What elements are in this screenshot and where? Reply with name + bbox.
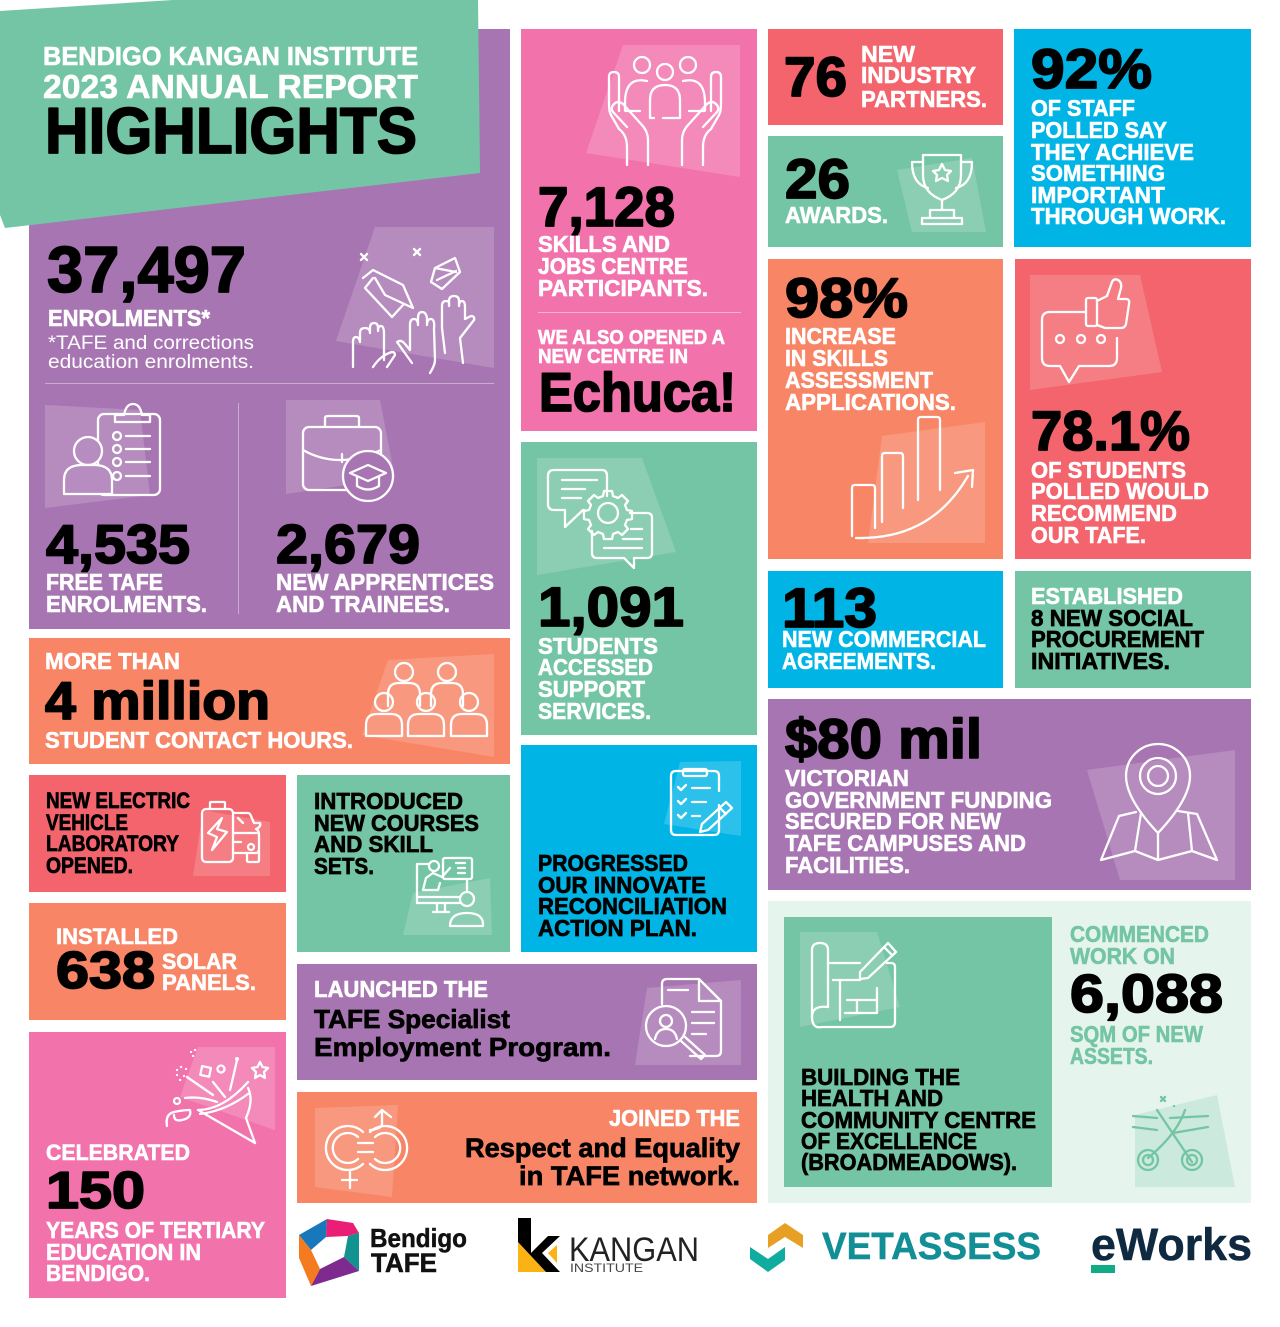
panel: respect and equality: in TAFE network. bbox=[519, 1161, 740, 1191]
icon: gender equality symbols bbox=[315, 1105, 407, 1197]
panel: reconciliation action plan bbox=[521, 745, 757, 952]
panel: skills and jobs centre: WE ALSO OPENED A bbox=[538, 327, 725, 349]
panel: solar panels: 638 bbox=[56, 942, 155, 1000]
panel: 98% skills assessment: 98% bbox=[785, 266, 908, 329]
icon: trophy bbox=[897, 155, 986, 232]
sub-panel: building the centre: OF EXCELLENCE bbox=[801, 1128, 977, 1154]
panel: social procurement: ESTABLISHED bbox=[1031, 583, 1183, 609]
stat: 6,088 sqm: COMMENCED bbox=[1070, 921, 1209, 947]
panel: 76 industry partners bbox=[768, 29, 1003, 125]
title banner bbox=[0, 0, 480, 228]
panel: reconciliation action plan: OUR INNOVATE bbox=[538, 872, 706, 898]
panel: skills and jobs centre: 7,128 bbox=[538, 175, 675, 238]
panel: 78.1% students: OUR TAFE. bbox=[1031, 522, 1146, 548]
stat: 37,497 enrolments: 37,497 bbox=[47, 233, 246, 306]
icon: briefcase and graduation cap bbox=[286, 400, 395, 501]
panel: support services bbox=[521, 442, 757, 735]
panel: 150 years: EDUCATION IN bbox=[46, 1239, 201, 1265]
panel: skills and jobs centre: NEW CENTRE IN bbox=[538, 346, 688, 368]
logo: Kangan Institute bbox=[518, 1218, 699, 1275]
panel: 113 commercial agreements: 113 bbox=[782, 576, 877, 639]
logo: Kangan Institute: KANGAN bbox=[569, 1231, 699, 1269]
stat: 2,679 new apprentices and trainees: AND TRAINEES. bbox=[276, 591, 450, 617]
panel: support services: SERVICES. bbox=[538, 698, 651, 724]
panel: respect and equality bbox=[297, 1092, 757, 1203]
panel: 78.1% students bbox=[1015, 259, 1251, 559]
panel: social procurement: INITIATIVES. bbox=[1031, 648, 1170, 674]
stat: 2,679 new apprentices and trainees bbox=[276, 513, 494, 617]
icon: electric car battery bbox=[193, 802, 270, 876]
sub-panel: building the centre: (BROADMEADOWS). bbox=[801, 1149, 1017, 1175]
panel: 150 years bbox=[29, 1032, 286, 1298]
panel: 98% skills assessment: IN SKILLS bbox=[785, 345, 888, 371]
panel: 113 commercial agreements: AGREEMENTS. bbox=[782, 648, 936, 674]
stat: 4,535 free TAFE enrolments: FREE TAFE bbox=[46, 569, 163, 595]
stat: 4,535 free TAFE enrolments: 4,535 bbox=[46, 513, 190, 575]
panel: skills and jobs centre bbox=[521, 29, 757, 431]
stat: 6,088 sqm: WORK ON bbox=[1070, 943, 1175, 969]
panel: 78.1% students: 78.1% bbox=[1031, 399, 1190, 462]
panel: electric vehicle laboratory: NEW ELECTRIC bbox=[46, 788, 190, 813]
panel: 26 awards: AWARDS. bbox=[785, 202, 888, 228]
panel: reconciliation action plan: RECONCILIATION bbox=[538, 893, 727, 919]
panel: 150 years: CELEBRATED bbox=[46, 1140, 190, 1165]
panel: $80 mil funding: VICTORIAN bbox=[785, 765, 909, 791]
title banner: HIGHLIGHTS bbox=[45, 94, 417, 167]
panel: 4 million contact hours: 4 million bbox=[45, 672, 270, 731]
panel: 92% staff: POLLED SAY bbox=[1031, 117, 1167, 143]
panel: $80 mil funding bbox=[768, 699, 1251, 890]
stat: 4,535 free TAFE enrolments bbox=[46, 513, 207, 617]
panel: skills and jobs centre: SKILLS AND bbox=[538, 231, 670, 257]
panel: new courses and skill sets: INTRODUCED bbox=[314, 788, 463, 814]
panel: 76 industry partners: NEW bbox=[861, 41, 915, 67]
panel: 76 industry partners: 76 bbox=[784, 45, 847, 108]
panel: 92% staff: IMPORTANT bbox=[1031, 182, 1165, 208]
stat: 4,535 free TAFE enrolments: ENROLMENTS. bbox=[46, 591, 207, 617]
panel: respect and equality: JOINED THE bbox=[609, 1105, 740, 1131]
logo: VETASSESS bbox=[750, 1223, 1041, 1272]
icon: clipboard and person bbox=[45, 404, 160, 508]
panel: reconciliation action plan: PROGRESSED bbox=[538, 850, 688, 876]
stat: 37,497 enrolments: *TAFE and corrections bbox=[48, 333, 254, 354]
logo: VETASSESS: VETASSESS bbox=[822, 1226, 1041, 1268]
panel: 92% staff: 92% bbox=[1031, 37, 1152, 100]
panel: solar panels: SOLAR bbox=[162, 949, 237, 974]
panel: support services: ACCESSED bbox=[538, 654, 653, 680]
panel: 150 years: 150 bbox=[46, 1162, 145, 1220]
panel: 76 industry partners: PARTNERS. bbox=[861, 86, 987, 112]
panel: respect and equality: Respect and Equality bbox=[465, 1133, 740, 1163]
panel: 78.1% students: POLLED WOULD bbox=[1031, 478, 1209, 504]
panel: $80 mil funding: FACILITIES. bbox=[785, 852, 910, 878]
icon: speech bubbles and gear bbox=[537, 458, 676, 575]
icon: hands holding people bbox=[586, 45, 740, 177]
stat: 37,497 enrolments: education enrolments. bbox=[48, 352, 254, 373]
stat: 37,497 enrolments bbox=[47, 233, 254, 373]
panel: new courses and skill sets bbox=[297, 775, 510, 952]
panel: 113 commercial agreements: NEW COMMERCIAL bbox=[782, 626, 986, 652]
panel: 98% skills assessment: APPLICATIONS. bbox=[785, 389, 956, 415]
panel: 92% staff: OF STAFF bbox=[1031, 95, 1135, 121]
panel: social procurement: 8 NEW SOCIAL bbox=[1031, 605, 1193, 631]
sub-panel: building the centre: BUILDING THE bbox=[801, 1064, 960, 1090]
panel: skills and jobs centre: PARTICIPANTS. bbox=[538, 275, 708, 301]
panel: 113 commercial agreements bbox=[768, 571, 1003, 688]
stat: 6,088 sqm: ASSETS. bbox=[1070, 1043, 1153, 1069]
panel: 150 years: YEARS OF TERTIARY bbox=[46, 1217, 265, 1243]
logo: Kangan Institute: INSTITUTE bbox=[570, 1261, 643, 1275]
panel: 150 years: BENDIGO. bbox=[46, 1260, 150, 1286]
stat: 6,088 sqm: SQM OF NEW bbox=[1070, 1021, 1203, 1047]
panel: 92% staff: SOMETHING bbox=[1031, 160, 1165, 186]
sub-panel: building the centre: HEALTH AND bbox=[801, 1085, 943, 1111]
panel: health and community centre bbox=[768, 901, 1251, 1203]
icon: group of students bbox=[362, 654, 494, 757]
panel: electric vehicle laboratory: OPENED. bbox=[46, 853, 133, 878]
panel: electric vehicle laboratory bbox=[29, 775, 286, 892]
panel: 26 awards: 26 bbox=[785, 147, 850, 210]
stat: 37,497 enrolments: ENROLMENTS* bbox=[48, 305, 210, 331]
icon: scissors cutting ribbon bbox=[1133, 1095, 1235, 1187]
icon: thumbs up speech bubble bbox=[1030, 275, 1162, 390]
panel: new courses and skill sets: SETS. bbox=[314, 853, 374, 879]
logo: Bendigo TAFE: TAFE bbox=[371, 1248, 437, 1278]
panel: support services: 1,091 bbox=[538, 575, 684, 638]
panel: skills and jobs centre: JOBS CENTRE bbox=[538, 253, 688, 279]
panel: TAFE specialist employment program: TAFE Specialist bbox=[314, 1004, 510, 1034]
panel: TAFE specialist employment program: LAUNCHED THE bbox=[314, 976, 488, 1002]
panel: 4 million contact hours: STUDENT CONTACT HOURS. bbox=[45, 727, 353, 753]
icon: checklist and pencil bbox=[664, 761, 741, 836]
panel: 92% staff: THEY ACHIEVE bbox=[1031, 139, 1194, 165]
logo: Bendigo TAFE: Bendigo bbox=[370, 1223, 467, 1253]
panel: electric vehicle laboratory: LABORATORY bbox=[46, 831, 179, 856]
panel: 78.1% students: OF STUDENTS bbox=[1031, 457, 1186, 483]
panel: social procurement bbox=[1015, 571, 1251, 688]
stat: 2,679 new apprentices and trainees: NEW APPRENTICES bbox=[276, 569, 494, 595]
panel: $80 mil funding: TAFE CAMPUSES AND bbox=[785, 830, 1026, 856]
icon: blueprint and pencil bbox=[800, 932, 900, 1027]
panel: electric vehicle laboratory: VEHICLE bbox=[46, 810, 128, 835]
icon: graduation caps and hands bbox=[336, 227, 494, 373]
panel: 26 awards bbox=[768, 136, 1003, 247]
panel: 98% skills assessment bbox=[768, 259, 1003, 559]
panel: support services: STUDENTS bbox=[538, 633, 658, 659]
stat: 2,679 new apprentices and trainees: 2,679 bbox=[276, 513, 420, 575]
panel: solar panels: PANELS. bbox=[162, 970, 256, 995]
title banner: 2023 ANNUAL REPORT bbox=[43, 68, 418, 105]
panel: skills and jobs centre: Echuca! bbox=[539, 361, 736, 423]
panel: $80 mil funding: $80 mil bbox=[785, 707, 982, 770]
icon: online presenter bbox=[403, 858, 492, 935]
panel: 76 industry partners: INDUSTRY bbox=[861, 62, 976, 88]
icon: party popper bbox=[167, 1047, 275, 1143]
panel: 92% staff bbox=[1014, 29, 1251, 247]
panel: TAFE specialist employment program bbox=[297, 964, 757, 1080]
stat: 6,088 sqm: 6,088 bbox=[1070, 964, 1223, 1024]
panel: new courses and skill sets: NEW COURSES bbox=[314, 810, 479, 836]
panel: solar panels: INSTALLED bbox=[56, 924, 178, 949]
panel: TAFE specialist employment program: Employment Program. bbox=[314, 1032, 611, 1062]
panel: new courses and skill sets: AND SKILL bbox=[314, 831, 433, 857]
sub-panel: building the centre bbox=[784, 917, 1052, 1187]
panel: solar panels bbox=[29, 903, 286, 1020]
panel: 98% skills assessment: INCREASE bbox=[785, 323, 896, 349]
title banner: BENDIGO KANGAN INSTITUTE bbox=[43, 41, 418, 71]
panel: 4 million contact hours: MORE THAN bbox=[45, 648, 180, 674]
panel: enrolments bbox=[29, 29, 510, 629]
panel: 92% staff: THROUGH WORK. bbox=[1031, 203, 1226, 229]
panel: $80 mil funding: GOVERNMENT FUNDING bbox=[785, 787, 1052, 813]
sub-panel: building the centre: COMMUNITY CENTRE bbox=[801, 1107, 1036, 1133]
panel: 4 million contact hours bbox=[29, 638, 510, 764]
icon: map pin bbox=[1087, 744, 1235, 880]
panel: 98% skills assessment: ASSESSMENT bbox=[785, 367, 933, 393]
stat: 6,088 sqm bbox=[1070, 921, 1223, 1069]
panel: reconciliation action plan: ACTION PLAN. bbox=[538, 915, 697, 941]
panel: $80 mil funding: SECURED FOR NEW bbox=[785, 808, 1001, 834]
panel: support services: SUPPORT bbox=[538, 676, 645, 702]
icon: rising bar chart bbox=[852, 417, 985, 543]
logo: eWorks: eWorks bbox=[1091, 1219, 1252, 1270]
panel: social procurement: PROCUREMENT bbox=[1031, 626, 1204, 652]
icon: document and magnifier bbox=[635, 979, 741, 1065]
logo: Bendigo TAFE bbox=[299, 1219, 467, 1286]
panel: 78.1% students: RECOMMEND bbox=[1031, 500, 1177, 526]
